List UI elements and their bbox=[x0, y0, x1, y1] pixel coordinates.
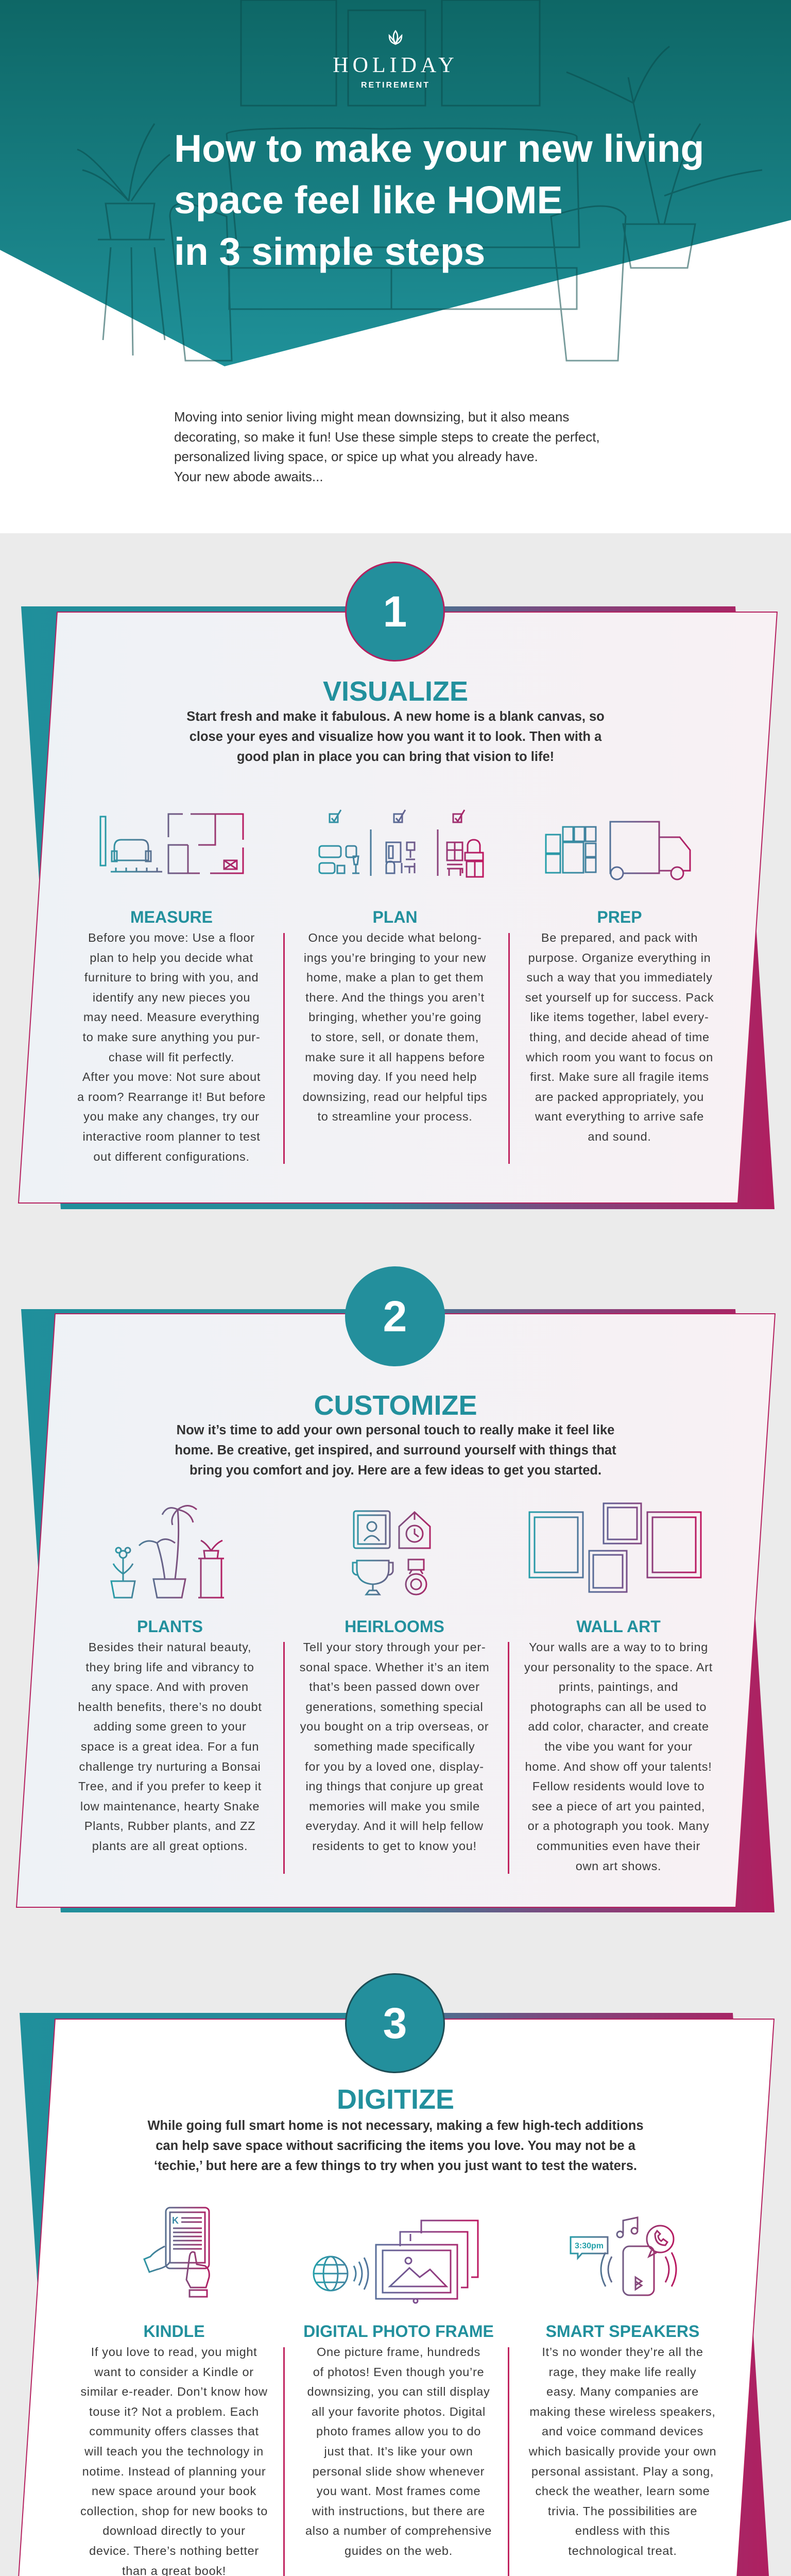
column: digital photo frame: DIGITAL PHOTO FRAME bbox=[303, 2322, 494, 2341]
column: plan: downsizing, read our helpful tips bbox=[303, 1090, 487, 1104]
column: digital photo frame: downsizing, you can still display bbox=[307, 2385, 490, 2398]
column: plan: Once you decide what belong- bbox=[308, 931, 482, 944]
column: measure: After you move: Not sure about bbox=[82, 1070, 261, 1083]
column: digital photo frame bbox=[303, 2322, 494, 2557]
column: smart speakers: making these wireless speakers, bbox=[529, 2405, 716, 2418]
column: kindle: touse it? Not a problem. Each bbox=[89, 2405, 259, 2418]
column: prep: PREP bbox=[597, 908, 642, 926]
column: smart speakers: endless with this bbox=[575, 2524, 670, 2537]
circle: step 3: 3 bbox=[383, 1999, 407, 2047]
column: wall art: see a piece of art you painted, bbox=[532, 1800, 705, 1813]
column: wall art: or a photograph you took. Many bbox=[528, 1819, 709, 1833]
column: kindle: device. There’s nothing better bbox=[89, 2544, 259, 2557]
column: measure: you make any changes, try our bbox=[83, 1110, 260, 1123]
column: kindle: download directly to your bbox=[102, 2524, 246, 2537]
column: digital photo frame: photo frames allow you to do bbox=[316, 2425, 481, 2438]
panel: visualize bbox=[18, 606, 778, 1209]
column: kindle: If you love to read, you might bbox=[91, 2345, 257, 2359]
column: heirlooms: that’s been passed down over bbox=[309, 1680, 480, 1693]
column: measure bbox=[77, 908, 266, 1163]
heading: digitize: DIGITIZE bbox=[337, 2084, 454, 2115]
column: measure: chase will fit perfectly. bbox=[109, 1050, 234, 1064]
column: wall art: prints, paintings, and bbox=[559, 1680, 678, 1693]
column: digital photo frame: of photos! Even though you’re bbox=[313, 2365, 484, 2379]
column: plan: to streamline your process. bbox=[317, 1110, 473, 1123]
intro text: Moving into senior living might mean downsizing, but it also means bbox=[174, 409, 569, 425]
column: smart speakers bbox=[528, 2322, 716, 2557]
column: wall art: home. And show off your talents! bbox=[525, 1760, 712, 1773]
intro: customize bbox=[175, 1423, 616, 1478]
circle: step 2 bbox=[345, 1266, 445, 1366]
column: heirlooms: memories will make you smile bbox=[309, 1800, 480, 1813]
icon: plants bbox=[110, 1505, 224, 1598]
intro: visualize: close your eyes and visualize how you want it to look. Then with a bbox=[190, 730, 601, 744]
intro text bbox=[174, 409, 600, 484]
column: smart speakers: and voice command devices bbox=[542, 2425, 703, 2438]
column: kindle: community offers classes that bbox=[89, 2425, 259, 2438]
column: prep: want everything to arrive safe bbox=[535, 1110, 704, 1123]
heading: customize: CUSTOMIZE bbox=[314, 1390, 477, 1421]
column: plan: PLAN bbox=[372, 908, 418, 926]
divider bbox=[283, 2347, 285, 2576]
column: prep bbox=[525, 908, 714, 1143]
intro: customize: Now it’s time to add your own personal touch to really make it feel like bbox=[177, 1423, 614, 1437]
column: measure: may need. Measure everything bbox=[83, 1010, 260, 1024]
column: kindle: want to consider a Kindle or bbox=[94, 2365, 254, 2379]
intro: visualize: good plan in place you can bring that vision to life! bbox=[237, 750, 554, 764]
intro text: decorating, so make it fun! Use these simple steps to create the perfect, bbox=[174, 429, 600, 444]
column: measure: interactive room planner to test bbox=[82, 1130, 261, 1143]
column: kindle: similar e-reader. Don’t know how bbox=[80, 2385, 268, 2398]
column: plants: any space. And with proven bbox=[91, 1680, 249, 1693]
icon: kindle: K bbox=[172, 2215, 179, 2226]
column: heirlooms: you bought on a trip overseas, or bbox=[300, 1720, 489, 1733]
column: digital photo frame: just that. It’s like your own bbox=[324, 2445, 473, 2458]
logo bbox=[333, 30, 458, 90]
column: plan: home, make a plan to get them bbox=[306, 971, 484, 984]
column: wall art: your personality to the space. Art bbox=[524, 1660, 713, 1674]
column: digital photo frame: all your favorite photos. Digital bbox=[312, 2405, 486, 2418]
column: digital photo frame: you want. Most frames come bbox=[317, 2484, 480, 2498]
intro: customize: bring you comfort and joy. Here are a few ideas to get you started. bbox=[190, 1463, 601, 1478]
column: plants: PLANTS bbox=[137, 1617, 203, 1636]
column: kindle: new space around your book bbox=[92, 2484, 256, 2498]
column: wall art: add color, character, and create bbox=[528, 1720, 709, 1733]
column: smart speakers: It’s no wonder they’re all the bbox=[542, 2345, 703, 2359]
column: plan: there. And the things you aren’t bbox=[305, 991, 485, 1004]
column: prep: Be prepared, and pack with bbox=[541, 931, 698, 944]
column: heirlooms: everyday. And it will help fellow bbox=[305, 1819, 484, 1833]
column: plants: space is a great idea. For a fun bbox=[81, 1740, 259, 1753]
column: plants: health benefits, there’s no doubt bbox=[78, 1700, 262, 1714]
column: smart speakers: which basically provide your own bbox=[529, 2445, 716, 2458]
column: prep: such a way that you immediately bbox=[526, 971, 713, 984]
column: smart speakers: personal assistant. Play a song, bbox=[531, 2465, 714, 2478]
column: smart speakers: SMART SPEAKERS bbox=[546, 2322, 699, 2341]
column: kindle: will teach you the technology in bbox=[84, 2445, 264, 2458]
intro: customize: home. Be creative, get inspired, and surround yourself with things that bbox=[175, 1443, 616, 1458]
icon: smart speakers bbox=[570, 2216, 677, 2296]
intro: digitize bbox=[147, 2119, 644, 2173]
column: heirlooms: residents to get to know you! bbox=[312, 1839, 477, 1853]
circle: step 3 bbox=[345, 1973, 445, 2073]
intro text: Your new abode awaits... bbox=[174, 469, 323, 484]
column: plants: low maintenance, hearty Snake bbox=[80, 1800, 260, 1813]
logo: RETIREMENT bbox=[361, 81, 430, 90]
column: measure: Before you move: Use a floor bbox=[88, 931, 255, 944]
intro: digitize: can help save space without sacrificing the items you love. You may not be a bbox=[156, 2139, 635, 2153]
column: wall art: Your walls are a way to to bring bbox=[529, 1640, 708, 1654]
column: prep: like items together, label every- bbox=[530, 1010, 709, 1024]
column: plants bbox=[78, 1617, 262, 1853]
title: in 3 simple steps bbox=[174, 230, 485, 273]
column: wall art: communities even have their bbox=[537, 1839, 700, 1853]
heading: visualize: VISUALIZE bbox=[323, 676, 468, 707]
column: digital photo frame: One picture frame, hundreds bbox=[317, 2345, 480, 2359]
column: heirlooms: ing things that conjure up great bbox=[305, 1780, 484, 1793]
icon: leaf bbox=[388, 30, 403, 45]
icon: kindle bbox=[143, 2207, 210, 2298]
column: digital photo frame: also a number of comprehensive bbox=[305, 2524, 492, 2537]
column: plants: plants are all great options. bbox=[92, 1839, 248, 1853]
column: plan: to store, sell, or donate them, bbox=[311, 1030, 479, 1044]
column: heirlooms: sonal space. Whether it’s an item bbox=[300, 1660, 489, 1674]
column: prep: which room you want to focus on bbox=[526, 1050, 713, 1064]
column: heirlooms: something made specifically bbox=[314, 1740, 475, 1753]
column: wall art: Fellow residents would love to bbox=[532, 1780, 704, 1793]
intro: visualize: Start fresh and make it fabulous. A new home is a blank canvas, so bbox=[186, 709, 605, 724]
icon: prep bbox=[545, 821, 691, 880]
icon: digital photo frame bbox=[313, 2219, 479, 2304]
column: heirlooms bbox=[300, 1617, 489, 1853]
column: wall art: WALL ART bbox=[576, 1617, 661, 1636]
column: measure: identify any new pieces you bbox=[93, 991, 250, 1004]
column: smart speakers: easy. Many companies are bbox=[546, 2385, 699, 2398]
column: smart speakers: trivia. The possibilities are bbox=[548, 2504, 697, 2518]
column: wall art: the vibe you want for your bbox=[544, 1740, 693, 1753]
column: plan: ings you’re bringing to your new bbox=[304, 951, 486, 964]
column: smart speakers: rage, they make life really bbox=[549, 2365, 696, 2379]
column: plants: they bring life and vibrancy to bbox=[85, 1660, 254, 1674]
column: prep: are packed appropriately, you bbox=[535, 1090, 704, 1104]
icon: smart speakers: 3:30pm bbox=[575, 2242, 604, 2250]
column: plan bbox=[303, 908, 487, 1123]
column: measure: plan to help you decide what bbox=[90, 951, 253, 964]
column: wall art: photographs can all be used to bbox=[530, 1700, 707, 1714]
column: kindle: notime. Instead of planning your bbox=[82, 2465, 266, 2478]
header banner bbox=[0, 0, 791, 366]
title: space feel like HOME bbox=[174, 178, 563, 222]
panel: digitize bbox=[18, 2013, 775, 2576]
column: prep: first. Make sure all fragile items bbox=[530, 1070, 709, 1083]
column: prep: thing, and decide ahead of time bbox=[529, 1030, 710, 1044]
column: heirlooms: generations, something special bbox=[306, 1700, 483, 1714]
column: measure: furniture to bring with you, and bbox=[84, 971, 259, 984]
column: plants: Besides their natural beauty, bbox=[89, 1640, 251, 1654]
column: measure: a room? Rearrange it! But before bbox=[77, 1090, 266, 1104]
title: How to make your new living bbox=[174, 127, 704, 170]
column: plan: moving day. If you need help bbox=[313, 1070, 477, 1083]
intro: visualize bbox=[186, 709, 605, 764]
column: digital photo frame: guides on the web. bbox=[345, 2544, 453, 2557]
column: measure: MEASURE bbox=[130, 908, 213, 926]
column: prep: purpose. Organize everything in bbox=[528, 951, 711, 964]
column: kindle bbox=[80, 2322, 268, 2576]
icon: plan bbox=[318, 809, 484, 878]
column: prep: and sound. bbox=[588, 1130, 651, 1143]
column: heirlooms: Tell your story through your per- bbox=[303, 1640, 486, 1654]
column: measure: out different configurations. bbox=[93, 1150, 250, 1163]
column: plants: Plants, Rubber plants, and ZZ bbox=[84, 1819, 255, 1833]
column: plants: Tree, and if you prefer to keep it bbox=[78, 1780, 262, 1793]
column: wall art: own art shows. bbox=[576, 1859, 661, 1873]
column: kindle: KINDLE bbox=[143, 2322, 205, 2341]
column: smart speakers: technological treat. bbox=[568, 2544, 677, 2557]
column: plan: make sure it all happens before bbox=[305, 1050, 485, 1064]
column: digital photo frame: with instructions, but there are bbox=[312, 2504, 485, 2518]
circle: step 1 bbox=[345, 562, 445, 662]
column: kindle: collection, shop for new books to bbox=[80, 2504, 268, 2518]
circle: step 1: 1 bbox=[383, 587, 407, 636]
intro text: personalized living space, or spice up what you already have. bbox=[174, 449, 538, 464]
icon: wall art bbox=[528, 1502, 701, 1593]
column: heirlooms: HEIRLOOMS bbox=[345, 1617, 444, 1636]
icon: measure bbox=[100, 813, 244, 874]
column: smart speakers: check the weather, learn some bbox=[535, 2484, 710, 2498]
intro: digitize: While going full smart home is not necessary, making a few high-tech additions bbox=[147, 2119, 644, 2133]
logo: HOLIDAY bbox=[333, 54, 458, 77]
intro: digitize: ‘techie,’ but here are a few things to try when you just want to test the waters. bbox=[154, 2159, 637, 2173]
column: plan: bringing, whether you’re going bbox=[308, 1010, 482, 1024]
divider bbox=[283, 1642, 285, 1874]
column: plants: challenge try nurturing a Bonsai bbox=[79, 1760, 261, 1773]
column: heirlooms: for you by a loved one, display- bbox=[305, 1760, 484, 1773]
divider bbox=[283, 933, 285, 1164]
icon: heirlooms bbox=[352, 1511, 431, 1595]
column: measure: to make sure anything you pur- bbox=[83, 1030, 260, 1044]
title bbox=[174, 127, 704, 273]
panel: customize bbox=[15, 1309, 776, 1912]
circle: step 2: 2 bbox=[383, 1292, 407, 1341]
column: digital photo frame: personal slide show whenever bbox=[313, 2465, 485, 2478]
column: wall art bbox=[524, 1617, 713, 1873]
column: plants: adding some green to your bbox=[93, 1720, 247, 1733]
column: prep: set yourself up for success. Pack bbox=[525, 991, 714, 1004]
